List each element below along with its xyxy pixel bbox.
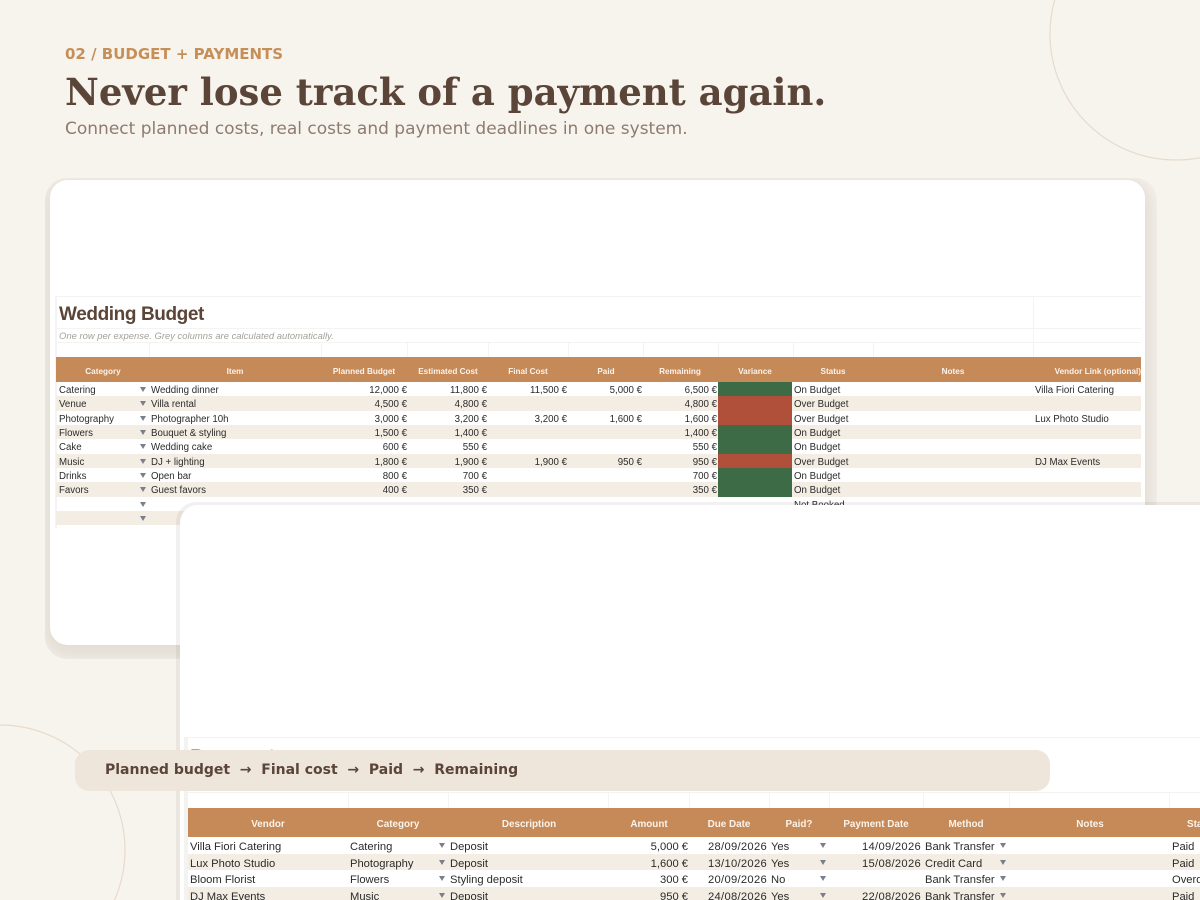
row: venue: Villa rental [151,399,196,410]
table header [56,357,1141,382]
row: drinks: Drinks [59,471,86,482]
row: drinks [59,468,840,482]
row: photography [59,411,1109,425]
row: villa fiori: 14/09/2026 [862,841,921,853]
row: favors: 350 € [693,485,717,496]
row: flowers [56,425,1141,439]
row: lux photo: Deposit [450,858,488,870]
table header: Notes [942,367,964,376]
row: drinks: 700 € [693,471,717,482]
panel: payments sheet [180,505,1200,900]
row: venue: 4,800 € [455,399,487,410]
row: favors [56,482,1141,497]
row: music: 950 € [618,457,642,468]
callout: flow pill [75,750,1050,791]
row: photography: 1,600 € [610,414,642,425]
row: flowers: Flowers [59,428,93,439]
row: photography: Photography [59,414,114,425]
row: villa fiori: Villa Fiori Catering [190,841,281,853]
row: bloom florist: 300 € [660,874,688,886]
payments table [188,808,1200,900]
row: cake [59,439,840,454]
row: photography: 1,600 € [685,414,717,425]
row: cake: Cake [59,442,82,453]
row: catering: Wedding dinner [151,385,219,396]
row: catering: 11,500 € [530,385,567,396]
row: catering: Catering [59,385,96,396]
table header: Planned Budget [333,367,395,376]
row: drinks: 700 € [463,471,487,482]
panel: wedding budget sheet [50,180,1145,645]
row: music: 1,900 € [455,457,487,468]
row: flowers: Bouquet & styling [151,428,226,439]
table header [188,808,1200,837]
row: lux photo: 1,600 € [651,858,688,870]
row: lux photo: Lux Photo Studio [190,858,275,870]
row: lux photo: 13/10/2026 [708,858,767,870]
title: Never lose track of a payment again. [65,70,826,114]
row: villa fiori: Bank Transfer [925,841,995,853]
row: catering: 11,800 € [450,385,487,396]
table header: Vendor [251,819,285,830]
table header: Method [948,819,984,830]
sheet note: One row per expense. Grey columns are calculated automatically. [59,331,334,342]
table header: Amount [630,819,668,830]
row: favors: Favors [59,485,89,496]
row: flowers: 1,400 € [455,428,487,439]
row: dj max [188,887,1200,900]
row: drinks: On Budget [794,471,840,482]
row: bloom florist: Bank Transfer [925,874,995,886]
row: photography: 3,200 € [535,414,567,425]
table header: Description [502,819,556,830]
row: favors: 350 € [463,485,487,496]
row: photography: Over Budget [794,414,848,425]
row: lux photo: Photography [350,858,413,870]
sheet title: Wedding Budget [59,304,204,325]
row: photography: 3,200 € [455,414,487,425]
row: drinks: 800 € [383,471,407,482]
table header: Category [377,819,419,830]
row: lux photo: 15/08/2026 [862,858,921,870]
row: cake: Wedding cake [151,442,212,453]
table header: Estimated Cost [418,367,478,376]
row: lux photo: Yes [771,858,789,870]
decorative circle: top right [1050,0,1200,161]
row: villa fiori: Catering [350,841,392,853]
row: music: 950 € [693,457,717,468]
row: villa fiori: 28/09/2026 [708,841,767,853]
table header: Remaining [659,367,701,376]
row: villa fiori: Paid [1172,841,1194,853]
row: bloom florist [190,874,1200,886]
row: villa fiori: Deposit [450,841,488,853]
row: villa fiori: 5,000 € [651,841,688,853]
row: bloom florist: Styling deposit [450,874,523,886]
row: favors: Guest favors [151,485,206,496]
row: music: 1,900 € [535,457,567,468]
row: flowers: 1,400 € [685,428,717,439]
budget table [56,357,1141,525]
row: cake: 600 € [383,442,407,453]
row: catering: 6,500 € [685,385,717,396]
row: lux photo: Credit Card [925,858,982,870]
table header: Vendor Link (optional) [1055,367,1141,376]
row: venue [56,396,1141,411]
row: catering [59,382,1114,396]
row: bloom florist: 20/09/2026 [708,874,767,886]
row: photography: 3,000 € [375,414,407,425]
row: venue: 4,500 € [375,399,407,410]
table header: Paid [597,367,615,376]
row: lux photo [188,854,1200,870]
row: bloom florist: Flowers [350,874,389,886]
table header: Status [820,367,846,376]
row: flowers: On Budget [794,428,840,439]
callout: flow pill: Planned budget → Final cost → Paid → Remaining [105,762,518,778]
table header: Variance [738,367,772,376]
row: catering: On Budget [794,385,840,396]
table header: Payment Date [843,819,909,830]
table header: Final Cost [508,367,548,376]
row: lux photo: Paid [1172,858,1194,870]
row: catering: 12,000 € [369,385,407,396]
row: empty [56,511,1141,525]
table header: Paid? [786,819,812,830]
row: bloom florist: Bloom Florist [190,874,255,886]
row: villa fiori: Yes [771,841,789,853]
row: catering: 5,000 € [610,385,642,396]
decorative circle: bottom left [0,724,126,900]
row: music: Music [59,457,84,468]
row: photography: Lux Photo Studio [1035,414,1109,425]
row: music: DJ Max Events [1035,457,1100,468]
panel: wedding budget sheet shadow [50,180,1145,645]
eyebrow: 02 / BUDGET + PAYMENTS [65,45,283,63]
row: music [56,454,1141,468]
table header: Item [227,367,243,376]
row: drinks: Open bar [151,471,191,482]
row: photography: Photographer 10h [151,414,229,425]
row: cake: On Budget [794,442,840,453]
row: not booked: Not Booked [794,500,845,511]
row: venue: 4,800 € [685,399,717,410]
row: favors: On Budget [794,485,840,496]
table header: Due Date [708,819,750,830]
table header: Category [85,367,121,376]
row: catering: Villa Fiori Catering [1035,385,1114,396]
row: flowers: 1,500 € [375,428,407,439]
sheet title: Payments [190,746,286,769]
row: music: 1,800 € [375,457,407,468]
row: not booked [140,500,845,511]
row: venue: Over Budget [794,399,848,410]
row: cake: 550 € [463,442,487,453]
row: music: Over Budget [794,457,848,468]
row: bloom florist: No [771,874,785,886]
subtitle: Connect planned costs, real costs and payment deadlines in one system. [65,119,688,139]
row: venue: Venue [59,399,86,410]
row: cake: 550 € [693,442,717,453]
table header: Notes [1076,819,1104,830]
row: favors: 400 € [383,485,407,496]
row: villa fiori [190,841,1194,853]
panel: payments sheet shadow [176,502,1200,900]
row: music: DJ + lighting [151,457,205,468]
